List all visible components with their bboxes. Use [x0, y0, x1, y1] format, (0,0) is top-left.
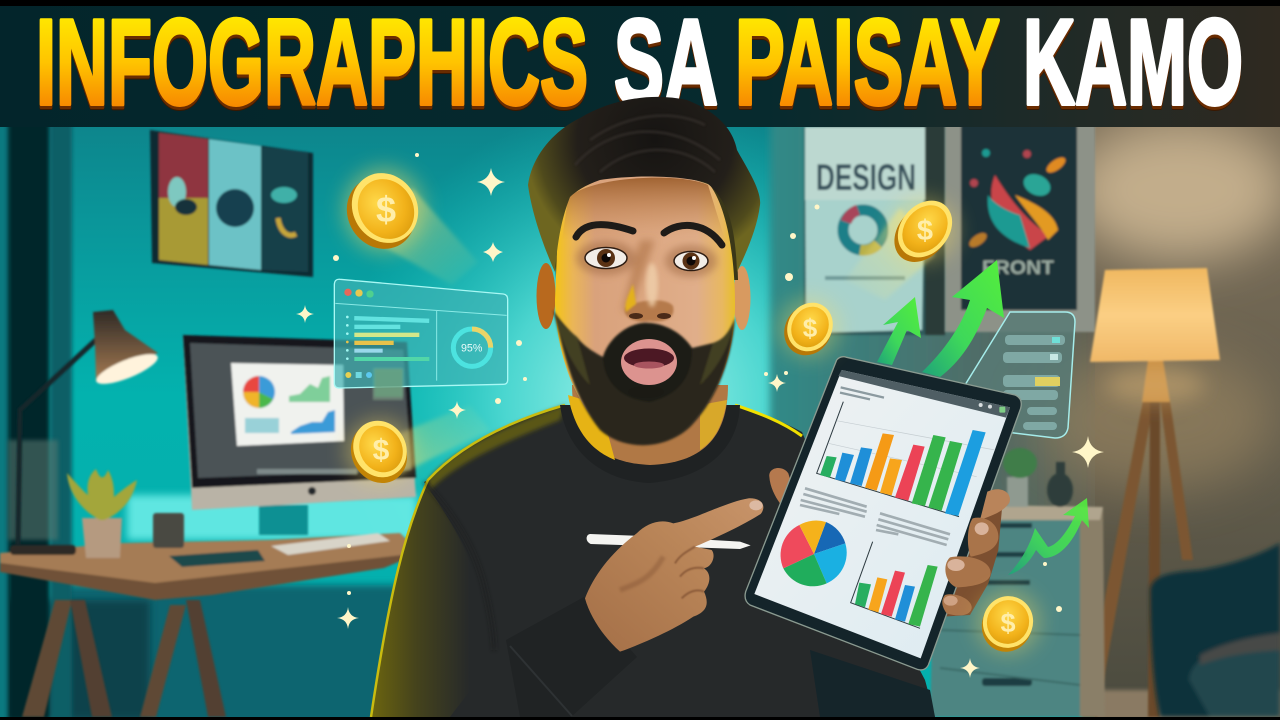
cabinet with plant	[930, 448, 1105, 717]
coin: top left: $	[376, 189, 396, 230]
sleeve cuff	[506, 597, 637, 717]
wall poster: DESIGN: DESIGN	[816, 157, 916, 198]
desk with items	[0, 469, 420, 717]
person: torso in black sweater	[371, 385, 935, 717]
glass panel: dashboard left: 95%	[461, 343, 483, 355]
coin: upper right: $	[917, 215, 933, 247]
tablet screen	[754, 370, 1010, 658]
eye left	[585, 248, 627, 268]
coin: bottom right	[974, 589, 1040, 659]
header lines	[840, 387, 884, 399]
main bar chart	[817, 402, 995, 517]
coin trails	[372, 188, 935, 475]
arrow: green up large	[922, 260, 1004, 377]
neck and collar	[560, 405, 740, 483]
armchair	[1150, 543, 1280, 717]
pointing hand	[585, 498, 763, 652]
mouth	[621, 339, 677, 385]
bottom black edge	[0, 717, 1280, 720]
small bar chart	[851, 542, 938, 628]
nose	[625, 263, 673, 322]
desk lamp	[18, 310, 161, 545]
person: ears	[536, 263, 750, 330]
eyebrows	[576, 225, 633, 237]
back of hand behind tablet	[943, 490, 1003, 617]
pie chart	[781, 520, 847, 586]
fingers gripping tablet	[980, 489, 1010, 520]
stylus pen	[587, 534, 751, 549]
coin: top left	[333, 161, 431, 262]
person: hair back layer	[552, 160, 738, 280]
face shading	[576, 240, 717, 312]
person: face	[553, 175, 735, 445]
coin: lower left	[340, 411, 418, 493]
person: hair	[528, 97, 760, 272]
thumb behind tablet	[769, 468, 793, 503]
monitor	[183, 335, 416, 535]
coin: middle right: $	[803, 313, 818, 343]
wall poster: DESIGN	[804, 110, 945, 335]
tablet	[585, 357, 1021, 670]
arrow: green up small	[877, 297, 921, 365]
beard	[553, 310, 735, 445]
coin: upper right	[883, 190, 963, 273]
floor lamp	[1082, 268, 1220, 717]
arrow: green zigzag	[1008, 498, 1089, 575]
text lines	[800, 488, 950, 545]
glass panel: settings right	[965, 312, 1075, 438]
sparkles	[296, 153, 1104, 678]
wall poster: abstract: FRONT	[982, 258, 1054, 279]
wall poster: left	[150, 130, 313, 277]
coin: bottom right: $	[1000, 608, 1016, 638]
eye right	[674, 252, 708, 270]
coin: lower left: $	[373, 434, 390, 467]
glass panel: dashboard left	[334, 279, 508, 397]
wall poster: abstract	[945, 112, 1095, 332]
title bar	[0, 0, 1280, 127]
tablet body	[745, 357, 1021, 670]
coin: middle right	[775, 294, 842, 364]
monitor glow band	[127, 495, 417, 540]
